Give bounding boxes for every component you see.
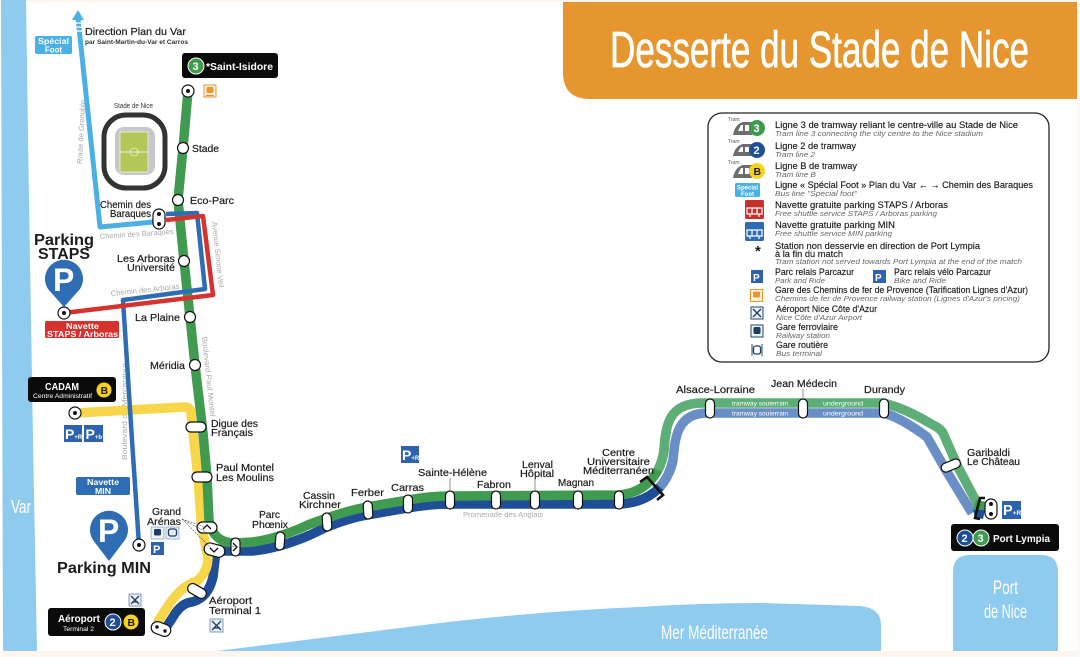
water: Mer Méditerranée: Mer Méditerranée <box>661 623 768 644</box>
legend row: bike and ride <box>873 267 991 285</box>
station connectors <box>182 389 803 549</box>
legend row: non-served station <box>755 241 1022 266</box>
station labels: coastal: Jean Médecin <box>771 378 837 390</box>
stations: terminals of shuttles and lines <box>58 209 165 551</box>
legend row: bike and ride: Bike and Ride <box>894 278 946 285</box>
icon: provence railway station <box>204 85 216 97</box>
badge: Navette MIN: Navette <box>87 478 120 487</box>
legend row: non-served station: * <box>755 243 761 260</box>
legend row: Chemins de fer de Provence <box>750 285 1028 303</box>
legend row: non-served station: Tram station not served towards Port Lympia at the end of the match <box>775 259 1022 266</box>
icon: airport terminal 1 <box>210 619 223 632</box>
legend row: non-served station: à la fin du match <box>775 249 843 259</box>
station labels: coastal: Parc <box>259 509 280 521</box>
terminus box: Saint-Isidore: *Saint-Isidore <box>206 61 273 73</box>
legend row: Spécial Foot <box>735 180 1034 198</box>
legend row: navette STAPS <box>745 200 949 219</box>
heading: Parking STAPS <box>34 232 94 263</box>
station labels: north branch: Les Moulins <box>216 472 274 484</box>
water: Port de Nice: Port <box>993 578 1019 599</box>
stadium icon <box>104 103 165 188</box>
heading: Parking STAPS: Parking <box>34 232 94 249</box>
station labels: north branch <box>85 26 274 617</box>
icon: P+R on coast: P+R <box>402 447 420 463</box>
legend row: Spécial Foot: Spécial <box>737 184 758 192</box>
legend row: park and ride: Parc relais Parcazur <box>775 267 854 277</box>
badge: Navette STAPS / Arboras <box>45 321 119 339</box>
legend row: park and ride <box>751 267 854 285</box>
legend row: tram 3: Tram line 3 connecting the city centre to the Nice stadium <box>775 131 983 138</box>
legend row: Spécial Foot: Bus line "Special foot" <box>775 191 858 198</box>
legend row: Chemins de fer de Provence: Chemins de fer de Provence railway station (Lignes d'Azur's pricing) <box>775 296 1020 303</box>
station labels: north branch: Aéroport <box>209 595 252 607</box>
station labels: coastal: Sainte-Hélène <box>418 467 487 479</box>
terminus box: Aéroport: Terminal 2 <box>63 626 94 633</box>
legend row: airport: Aéroport Nice Côte d'Azur <box>776 304 877 314</box>
street names <box>75 100 543 519</box>
station labels: coastal: Méditerranéen <box>583 465 654 477</box>
stadium icon: Stade de Nice <box>114 103 153 110</box>
icon: P+R Port Lympia: P+R <box>1003 503 1021 519</box>
station labels: coastal <box>252 378 1020 531</box>
station labels: coastal: Ferber <box>351 487 385 499</box>
pin: Parking STAPS <box>45 260 83 307</box>
station labels: north branch: Français <box>211 427 253 439</box>
badge: Spécial Foot: Spécial <box>38 37 69 46</box>
station labels: north branch: Arénas <box>147 516 181 528</box>
legend row: navette MIN: Free shuttle service MIN parking <box>775 231 892 238</box>
station labels: coastal: Le Château <box>967 456 1020 468</box>
underground labels: tramway souterrain <box>732 412 788 418</box>
title banner <box>563 2 1077 99</box>
terminus box: CADAM: CADAM <box>45 382 79 393</box>
legend row: Spécial Foot: Foot <box>741 191 755 198</box>
stations: horizontal capsules <box>150 422 240 638</box>
water: Var river: Var <box>11 497 31 517</box>
shuttle STAPS line <box>64 216 213 313</box>
icon: park and ride MIN: P <box>153 544 160 556</box>
badge: Spécial Foot <box>35 36 72 54</box>
terminus box: Port Lympia: Port Lympia <box>993 533 1050 545</box>
terminus box: Saint-Isidore: 3 <box>192 61 199 73</box>
legend row: park and ride: Park and Ride <box>775 278 825 285</box>
badge: Spécial Foot: Foot <box>45 46 62 54</box>
legend row: tram 3: Ligne 3 de tramway reliant le centre-ville au Stade de Nice <box>775 120 1018 130</box>
station labels: north branch: Les Arboras <box>117 253 175 265</box>
street names: Avenue Simone Veil <box>210 221 226 288</box>
heading: Parking MIN: Parking MIN <box>57 560 151 577</box>
station labels: coastal: Cassin <box>303 490 335 502</box>
legend row: railway station: Gare ferroviaire <box>776 322 838 332</box>
legend row: tram B: Tram <box>728 160 739 166</box>
line: Spécial Foot <box>72 10 153 227</box>
station labels: coastal: Durandy <box>864 384 906 396</box>
legend row: bus terminal <box>752 340 828 358</box>
badge: Navette STAPS / Arboras: Navette <box>66 322 100 331</box>
legend row: Chemins de fer de Provence: Gare des Chemins de fer de Provence (Tarification Lignes d'Azur) <box>775 285 1028 295</box>
legend row: non-served station: Station non desservie en direction de Port Lympia <box>775 241 980 251</box>
stations: tram 3 north <box>172 85 200 370</box>
underground section: blue <box>660 413 972 513</box>
station labels: coastal: Centre <box>602 447 635 459</box>
heading: Parking STAPS: STAPS <box>38 246 90 263</box>
icons: park and ride at CADAM <box>64 425 103 442</box>
terminus box: Port Lympia <box>951 524 1059 551</box>
station labels: north branch: Eco-Parc <box>190 195 234 207</box>
badge: Navette STAPS / Arboras: STAPS / Arboras <box>47 330 119 339</box>
station labels: coastal: Magnan <box>558 477 594 489</box>
station labels: coastal: Carras <box>391 482 424 494</box>
legend row: tram B <box>728 160 858 179</box>
station labels: coastal: Garibaldi <box>967 447 1010 459</box>
street names: Chemin des Baraques <box>100 227 174 241</box>
icons: Grand Arénas train and bus <box>151 527 179 539</box>
terminus box: Aéroport: B <box>128 617 136 629</box>
pin: Parking MIN <box>90 511 128 561</box>
legend row: airport: Nice Côte d'Azur Airport <box>776 315 863 322</box>
terminus box: CADAM: B <box>100 385 108 397</box>
legend row: tram 2: Ligne 2 de tramway <box>775 141 857 151</box>
terminus box: Port Lympia: 2 <box>962 533 968 545</box>
icons: park and ride at CADAM: P+R <box>65 426 83 442</box>
legend row: navette STAPS: Free shuttle service STAPS / Arboras parking <box>775 211 937 218</box>
legend row: bus terminal: Gare routière <box>776 340 828 350</box>
underground labels: tramway souterrain <box>732 402 788 408</box>
terminus colour stub <box>973 500 987 519</box>
terminus box: Aéroport: Aéroport <box>58 613 100 625</box>
line: tram 2 coastal section <box>163 460 673 632</box>
station labels: north branch: Méridia <box>150 360 185 372</box>
legend row: tram 3 <box>728 117 1018 138</box>
water: Port de Nice <box>953 555 1058 651</box>
icon: park and ride MIN <box>151 542 164 556</box>
station labels: north branch: Stade <box>192 143 219 155</box>
terminus box: CADAM <box>28 377 116 402</box>
street names: Chemin des Arboras <box>110 282 180 298</box>
station labels: coastal: Alsace-Lorraine <box>676 384 755 396</box>
street names: Boulevard du Mercantour <box>120 362 129 460</box>
water: Var river <box>1 0 37 651</box>
legend row: navette MIN <box>745 220 895 241</box>
terminus box: Aéroport <box>48 608 145 636</box>
legend row: tram 2 <box>728 139 857 159</box>
legend row: navette STAPS: Navette gratuite parking STAPS / Arboras <box>775 200 949 210</box>
legend row: railway station <box>751 322 838 340</box>
terminus box: CADAM: Centre Administratif <box>33 393 92 400</box>
terminus box: Port Lympia: 3 <box>978 533 984 545</box>
legend <box>708 113 1049 362</box>
water: Mer Méditerranée <box>217 603 881 651</box>
legend row: Spécial Foot: Ligne « Spécial Foot » Plan du Var ← → Chemin des Baraques <box>775 180 1034 190</box>
station labels: coastal: Kirchner <box>299 499 342 511</box>
legend row: park and ride: P <box>753 273 760 284</box>
street names: Boulevard Paul Montel <box>200 336 217 417</box>
station labels: north branch: Direction Plan du Var <box>85 26 187 38</box>
station labels: coastal: Fabron <box>477 479 511 491</box>
terminus box: Saint-Isidore <box>182 53 278 78</box>
station labels: north branch: Baraques <box>110 208 151 220</box>
station labels: north branch: La Plaine <box>135 312 180 324</box>
station labels: coastal: Universitaire <box>587 456 650 468</box>
legend row: tram 2: Tram <box>728 139 739 145</box>
legend row: tram 3: Tram <box>728 117 739 123</box>
station labels: coastal: Lenval <box>522 459 553 471</box>
legend row: bike and ride: P <box>875 273 882 284</box>
shuttle MIN line <box>123 213 205 545</box>
station labels: coastal: Phœnix <box>252 519 289 531</box>
legend row: tram B: B <box>754 166 762 178</box>
legend row: tram B: Ligne B de tramway <box>775 161 858 171</box>
station labels: north branch: Digue des <box>211 418 258 430</box>
station labels: north branch: Université <box>127 262 175 274</box>
street names: Promenade des Anglais <box>463 510 543 519</box>
street names: Route de Grenoble <box>75 100 87 164</box>
underground section: green <box>658 403 978 505</box>
pin: Parking MIN: P <box>98 513 119 549</box>
underground labels: underground <box>823 412 863 418</box>
station labels: north branch: Grand <box>152 506 181 518</box>
legend row: navette MIN: Navette gratuite parking MIN <box>775 220 895 230</box>
underground labels <box>732 402 863 418</box>
terminus box: Aéroport: 2 <box>110 617 116 629</box>
station labels: north branch: Paul Montel <box>216 462 274 474</box>
line: tram B yellow <box>75 407 208 623</box>
badge: Navette MIN <box>76 477 130 496</box>
legend row: tram 3: 3 <box>754 123 760 135</box>
icons: park and ride at CADAM: P+b <box>86 426 102 442</box>
station labels: north branch: Terminal 1 <box>209 605 261 617</box>
badge: Navette MIN: MIN <box>95 487 111 496</box>
water: Port de Nice: de Nice <box>984 602 1027 623</box>
legend row: airport <box>751 304 877 322</box>
station labels: north branch: Chemin des <box>100 199 151 211</box>
legend row: bus terminal: Bus terminal <box>776 351 823 358</box>
pin: Parking STAPS: P <box>53 262 74 298</box>
portal brackets <box>640 477 985 519</box>
legend row: tram B: Tram line B <box>775 172 816 179</box>
icon: airport terminal 2 <box>129 594 141 606</box>
underground labels: underground <box>823 402 863 408</box>
station labels: coastal: Hôpital <box>520 468 554 480</box>
legend row: bike and ride: Parc relais vélo Parcazur <box>894 267 991 277</box>
stations: coastal capsules <box>275 399 997 550</box>
legend row: railway station: Railway station <box>776 333 830 340</box>
station labels: north branch: par Saint-Martin-du-Var et Carros <box>85 40 189 46</box>
legend row: tram 2: 2 <box>754 145 760 157</box>
legend row: tram 2: Tram line 2 <box>775 152 815 159</box>
line: tram 3 north section <box>178 91 667 543</box>
